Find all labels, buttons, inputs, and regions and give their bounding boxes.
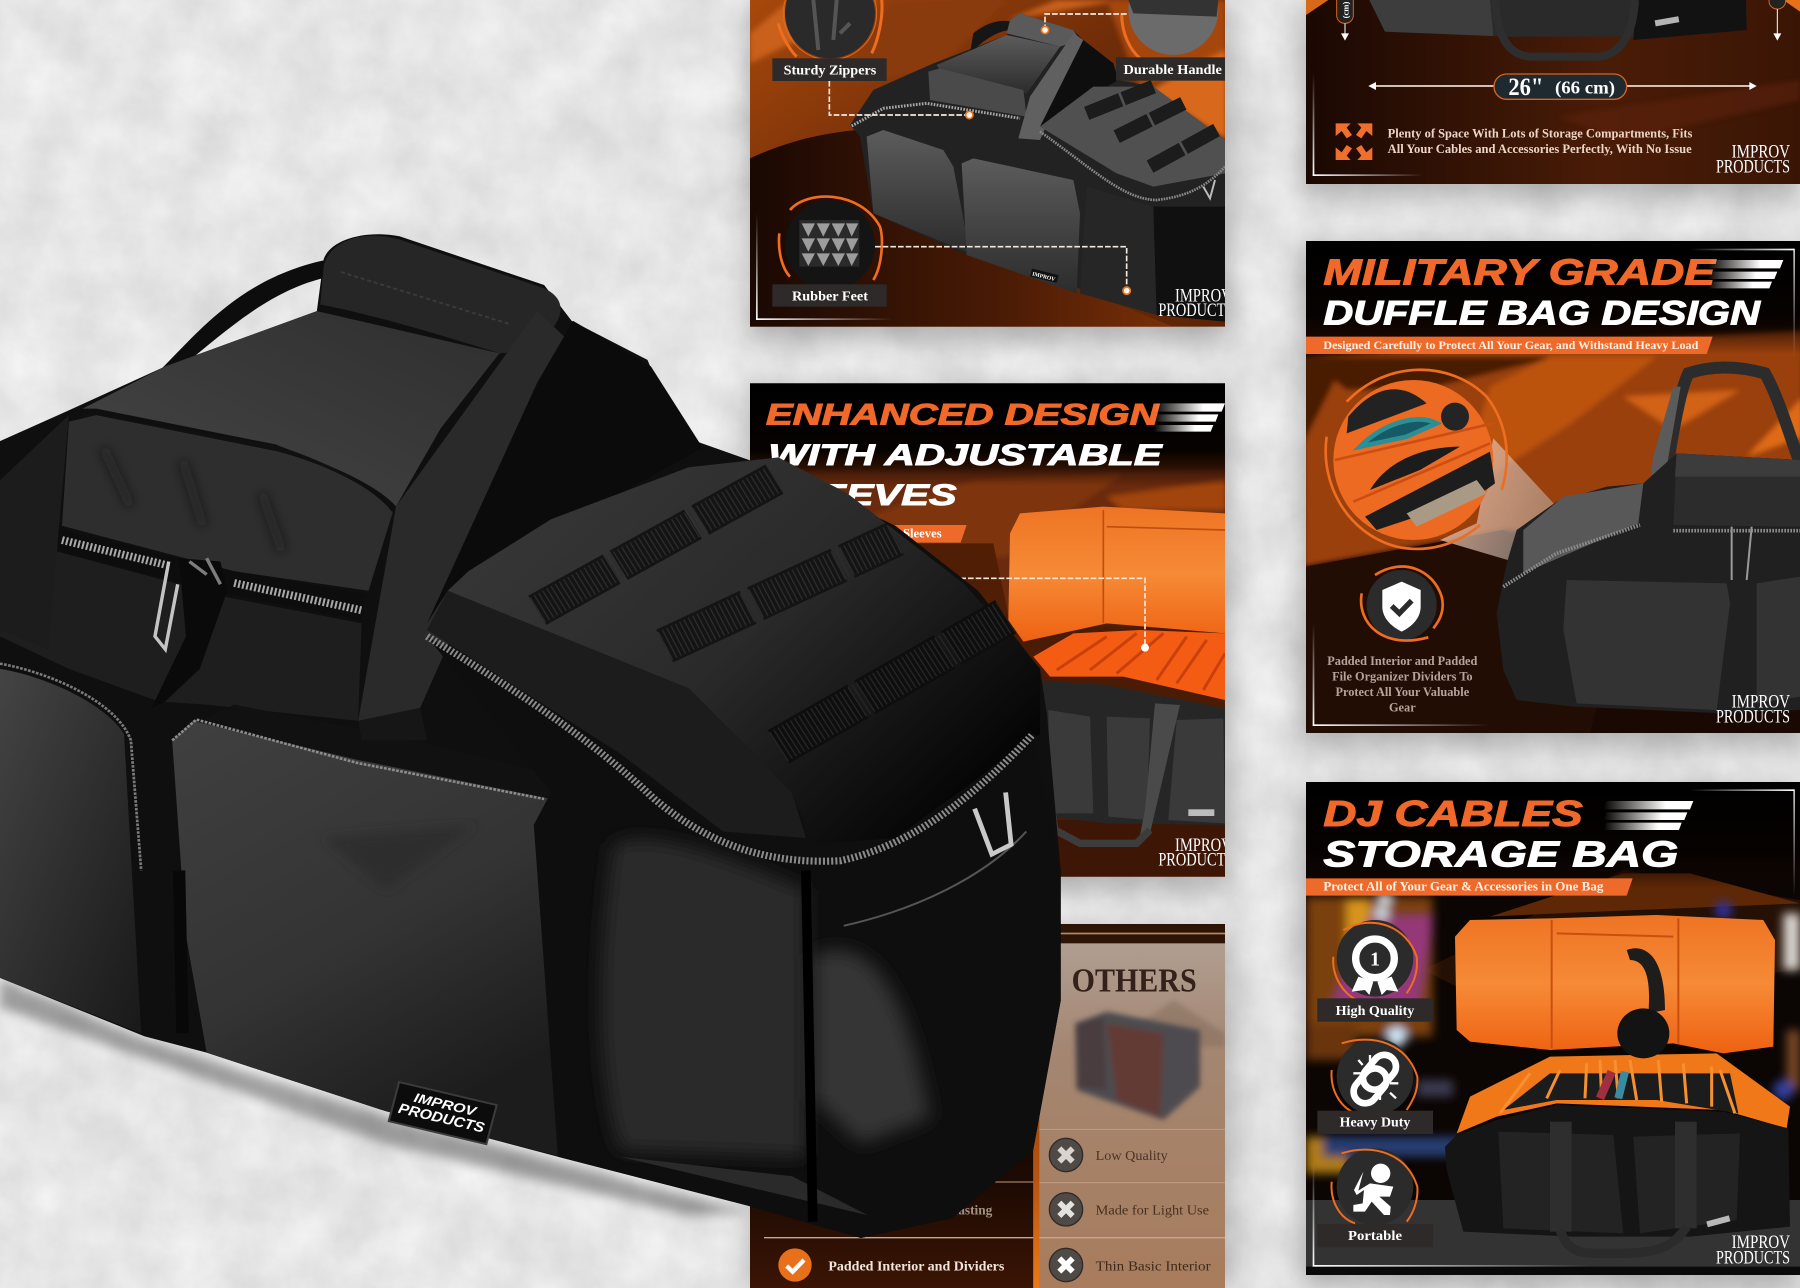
leader line	[945, 578, 1145, 647]
subtitle banner	[894, 525, 967, 543]
speed stripes	[1153, 403, 1225, 432]
description	[1388, 127, 1693, 156]
top handle pad	[320, 236, 561, 353]
stage floor	[1306, 1200, 1800, 1275]
title	[765, 398, 1163, 512]
webbing straps	[537, 477, 1006, 747]
subtitle banner: Designed Carefully to Protect All Your Gear, and Withstand Heavy Load	[1323, 338, 1699, 352]
speed stripes	[1603, 801, 1693, 830]
callout: rubber feet: Rubber Feet	[792, 289, 868, 304]
badge: heavy duty	[1317, 1038, 1433, 1134]
subtitle banner: Protect All of Your Gear & Accessories in One Bag	[1323, 880, 1604, 894]
badge: portable	[1317, 1148, 1433, 1247]
brand: improv products: IMPROV	[1175, 835, 1232, 856]
description: Protect All Your Valuable	[1335, 685, 1470, 699]
dark rear wall	[427, 321, 703, 623]
headphones	[1627, 948, 1665, 1013]
carry strap	[162, 260, 327, 379]
title: MILITARY GRADE	[1323, 251, 1716, 292]
bag photo	[1369, 0, 1747, 57]
brand: improv products	[1716, 145, 1790, 172]
bag photo	[850, 13, 1225, 322]
width arrow: (66 cm)	[1555, 77, 1615, 98]
row: materials	[1048, 1138, 1168, 1172]
frame corners	[1313, 789, 1795, 1267]
left pocket	[0, 669, 141, 1033]
brand: improv products	[1716, 691, 1790, 728]
height arrows: (cm)	[1340, 1, 1350, 18]
callout: sturdy zippers: Sturdy Zippers	[784, 64, 877, 79]
title: SLEEVES	[765, 479, 957, 512]
badge: high quality: High Quality	[1336, 1003, 1415, 1018]
others heading: OTHERS	[1072, 962, 1197, 999]
row: padded interior: Padded Interior and Dividers	[828, 1258, 1004, 1273]
dashed leader lines	[829, 14, 1127, 290]
box lid	[83, 311, 499, 506]
width arrow: 26"	[1508, 73, 1543, 101]
title: WITH ADJUSTABLE	[768, 439, 1163, 472]
zipper pulls	[155, 562, 178, 649]
box front	[62, 415, 393, 591]
title	[1323, 793, 1678, 875]
panel: dimensions	[1306, 0, 1800, 184]
brand: improv products	[1716, 1232, 1790, 1268]
bag photo	[1497, 367, 1800, 713]
center pocket	[172, 721, 561, 1157]
description: All Your Cables and Accessories Perfectly, With No Issue	[1388, 142, 1692, 156]
ghost bag image	[1075, 1012, 1200, 1120]
description	[1327, 654, 1478, 715]
icon: shield	[1361, 567, 1443, 641]
open bag photo	[1445, 915, 1790, 1253]
width arrow	[1368, 73, 1757, 101]
brand: improv products: IMPROV	[1175, 286, 1232, 307]
spotlight beam	[1440, 438, 1557, 567]
callout: rubber feet	[772, 197, 887, 307]
product label: IMPROV	[412, 1090, 479, 1119]
panel: comparison table	[750, 924, 1225, 1288]
panel shadows	[748, 0, 1800, 1288]
frame corners	[1313, 249, 1795, 726]
brand: improv products: PRODUCTS	[1158, 300, 1233, 321]
stage bokeh	[1306, 892, 1800, 1173]
strap	[358, 311, 579, 721]
row: long lasting: Made for Light Use	[1096, 1202, 1209, 1217]
badge: portable: Portable	[1348, 1228, 1402, 1243]
d-ring	[975, 792, 1011, 854]
large black duffle bag photo	[0, 234, 1061, 1238]
subtitle banner	[1306, 878, 1633, 896]
right top panel	[448, 457, 1040, 844]
callout: padded dividers detail circle	[1326, 370, 1507, 549]
description: File Organizer Dividers To	[1332, 670, 1473, 684]
speed stripes	[1707, 260, 1783, 288]
icon: expand arrows	[1336, 123, 1372, 160]
panel: enhanced design with adjustable sleeves	[750, 383, 1233, 877]
badge: high quality: 1	[1370, 949, 1380, 971]
callout: durable handle: Durable Handle	[1123, 63, 1222, 78]
row: materials: Premium Materials	[908, 1148, 1019, 1163]
title: ENHANCED DESIGN	[766, 398, 1160, 431]
height arrows	[1337, 0, 1786, 41]
panel: feature callouts (rubber feet, zippers, handle)	[750, 0, 1233, 327]
frame corner	[1313, 73, 1423, 176]
description: Gear	[1389, 701, 1416, 715]
bag photo: IMPROV	[1031, 272, 1057, 283]
row: padded interior: Thin Basic Interior	[1096, 1258, 1211, 1273]
callout: sturdy zippers	[772, 0, 887, 81]
title: DJ CABLES	[1323, 793, 1583, 834]
panel: military grade duffle bag design	[1303, 241, 1800, 734]
main zipper	[427, 636, 1033, 861]
brand: improv products	[1158, 289, 1225, 316]
title: DUFFLE BAG DESIGN	[1323, 294, 1762, 332]
frame corner	[756, 213, 893, 320]
lower right body	[427, 636, 1061, 1238]
row: long lasting: Durable & Long Lasting	[852, 1202, 993, 1217]
callout: durable handle	[1116, 0, 1225, 81]
row: materials: Low Quality	[1096, 1148, 1168, 1163]
subtitle banner: Padded Adjustable Sleeves	[798, 526, 942, 540]
row: padded interior	[778, 1248, 1211, 1282]
badge: heavy duty: Heavy Duty	[1340, 1115, 1411, 1130]
product label: PRODUCTS	[396, 1101, 486, 1136]
badge: high quality	[1317, 920, 1433, 1022]
panel: dj cables storage bag	[1306, 782, 1800, 1275]
brand: improv products	[1158, 838, 1225, 866]
title: STORAGE BAG	[1323, 834, 1678, 875]
row: long lasting	[957, 1192, 1208, 1227]
title	[1323, 258, 1762, 326]
open bag photo	[1008, 507, 1225, 843]
description: Plenty of Space With Lots of Storage Compartments, Fits	[1388, 127, 1693, 141]
brand: improv products: PRODUCTS	[1158, 849, 1233, 870]
description: Padded Interior and Padded	[1327, 654, 1478, 668]
product label	[389, 1082, 497, 1144]
